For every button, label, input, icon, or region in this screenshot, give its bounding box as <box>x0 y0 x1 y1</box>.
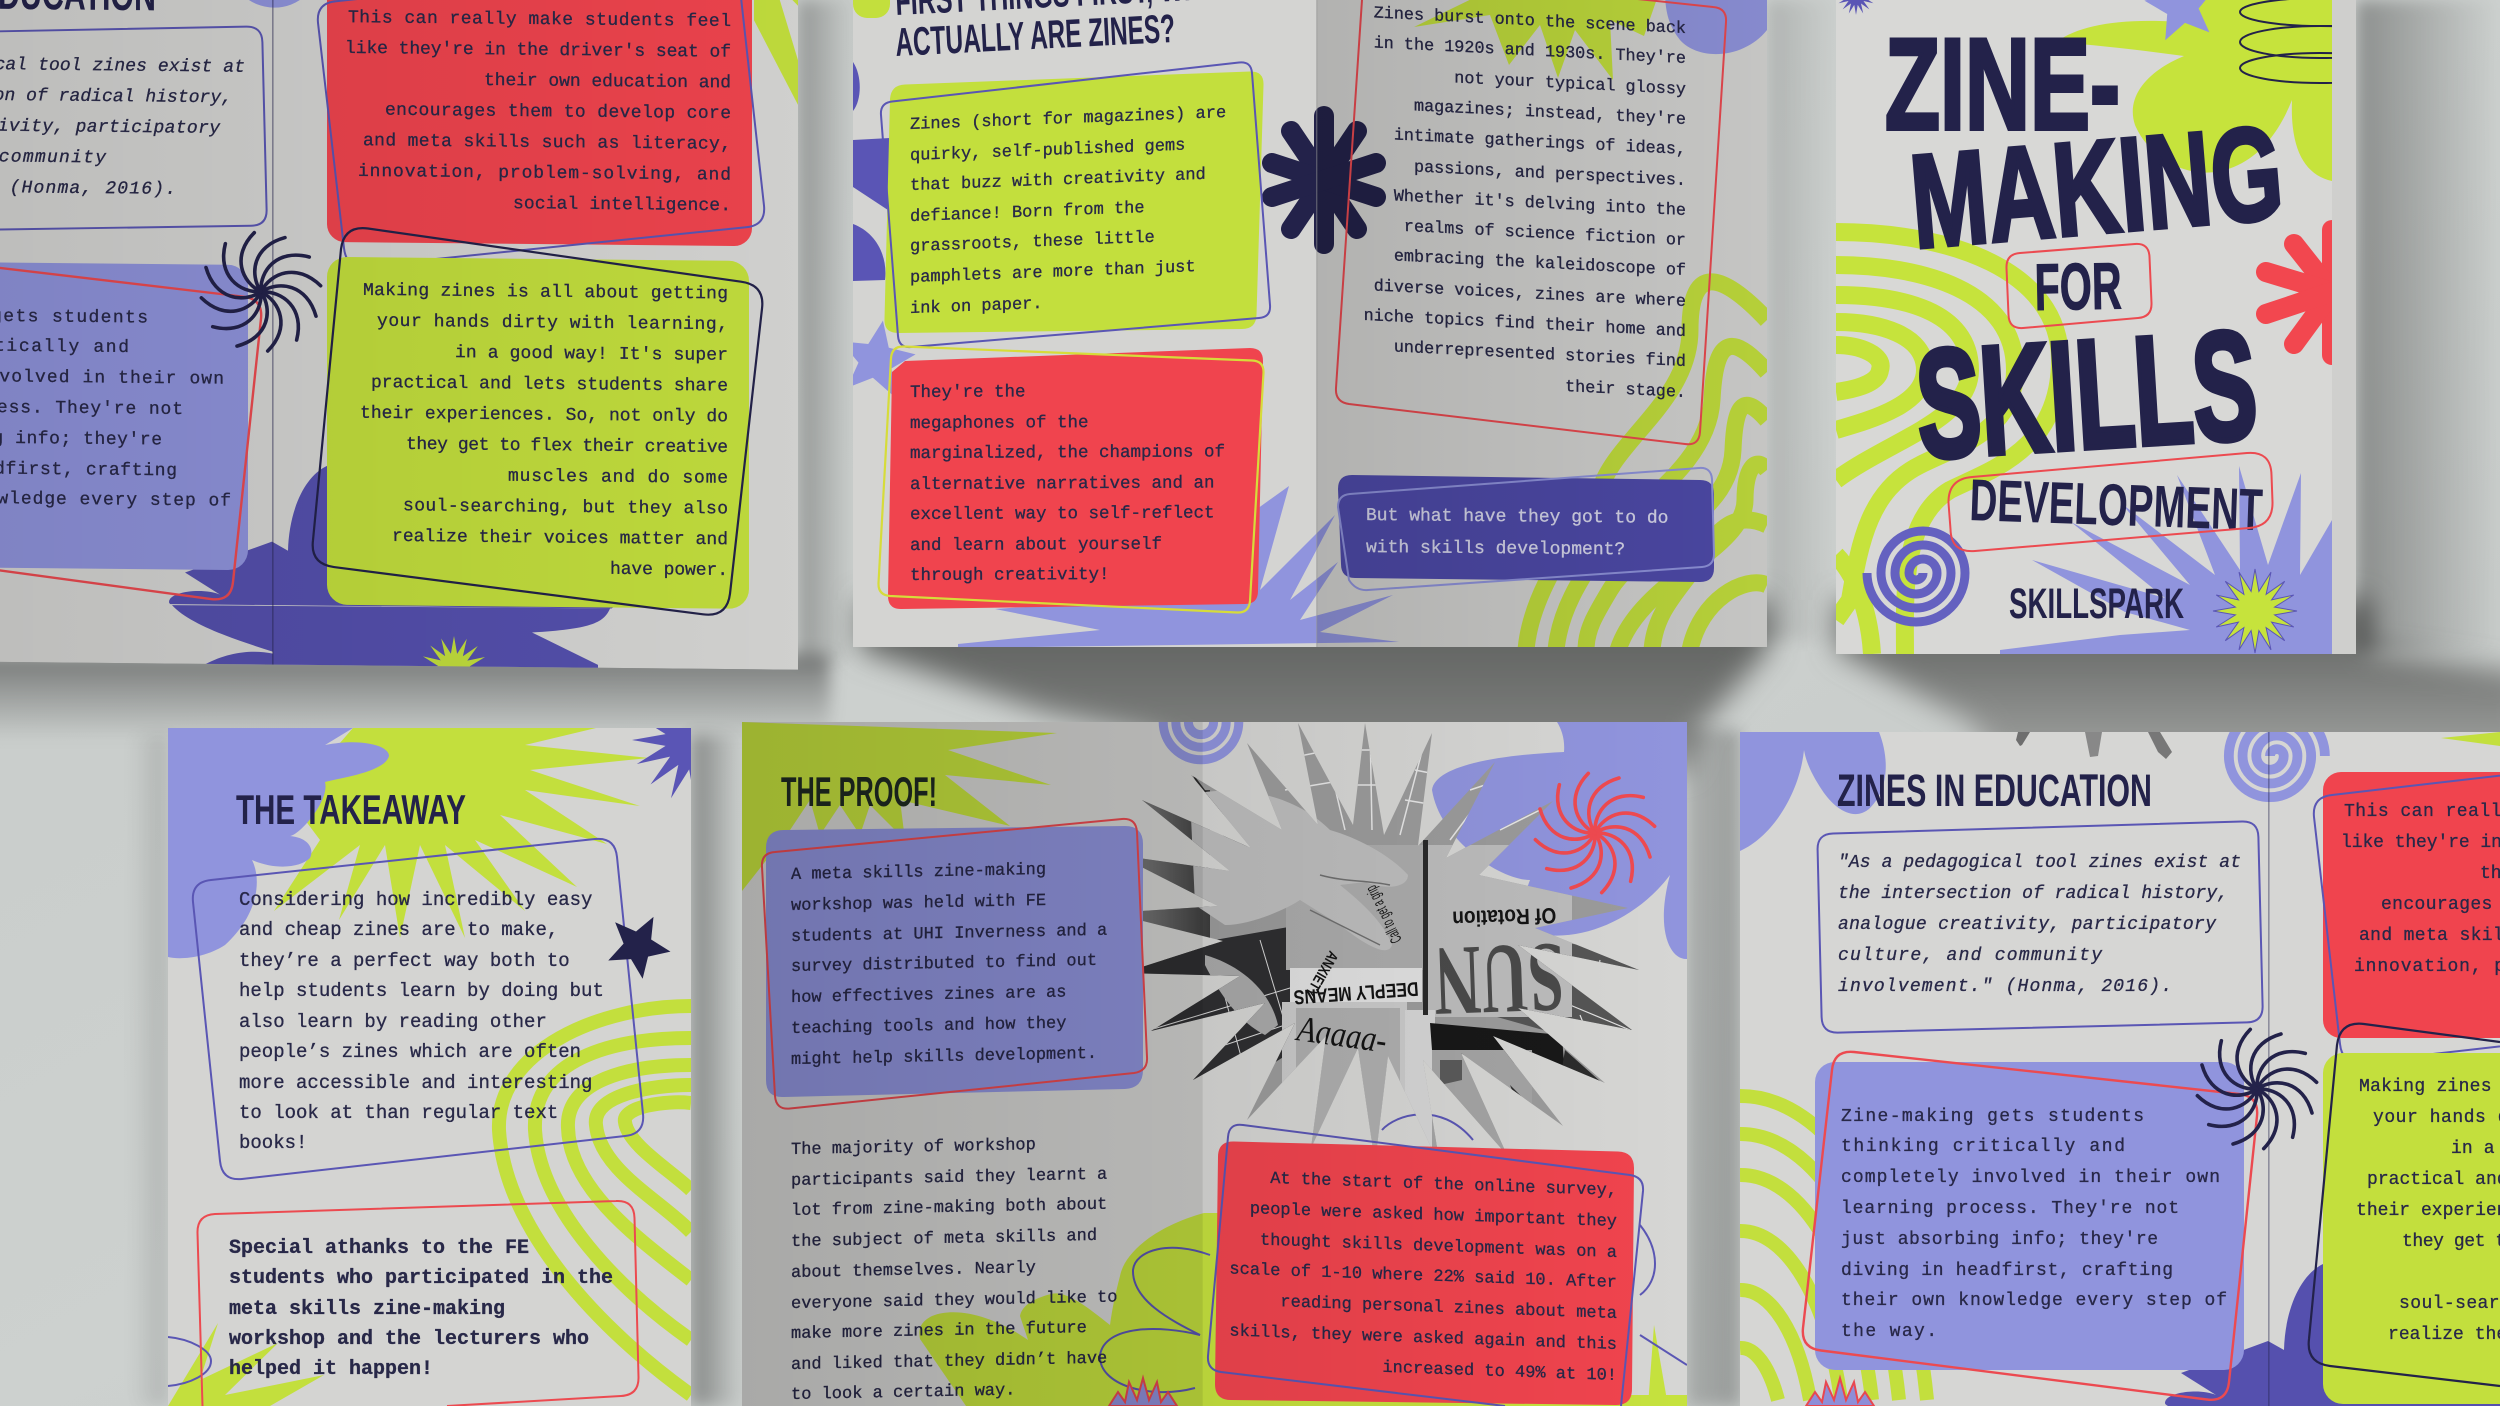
top spikes <box>1280 725 1540 840</box>
red box text <box>345 8 731 216</box>
periwinkle box text: Zine-making gets students <box>1841 1107 2144 1127</box>
takeaway text: to look at than regular text <box>239 1102 558 1124</box>
takeaway text: Considering how incredibly easy <box>239 889 592 911</box>
lime box text: your hands dirty with learning, <box>377 312 728 335</box>
hand <box>1190 791 1408 950</box>
lime box outline <box>881 62 1270 347</box>
red box text: their own education and <box>484 71 731 93</box>
lime box text: realize their voices matter and <box>392 527 728 550</box>
lime rays top-left <box>742 722 1057 891</box>
right page text: underrepresented stories find <box>1394 338 1686 372</box>
survey text: skills, they were asked again and this <box>1229 1322 1617 1355</box>
red box text: social intelligence. <box>513 194 731 216</box>
periwinkle text box <box>1815 1062 2244 1370</box>
red box text: marginalized, the champions of <box>910 442 1225 464</box>
outline box <box>193 839 643 1179</box>
navy outline <box>2309 1024 2500 1386</box>
quote text: the intersection of radical history, <box>1838 884 2228 904</box>
periwinkle box text <box>1841 1107 2227 1342</box>
cover title: SKILLS <box>1912 299 2261 491</box>
workshop text: survey distributed to find out <box>791 952 1097 977</box>
workshop text: students at UHI Inverness and a <box>791 922 1107 947</box>
right page text: Zines burst onto the scene back <box>1374 4 1686 39</box>
results paragraph: make more zines in the future <box>791 1319 1087 1344</box>
red box outline <box>1208 1125 1643 1406</box>
lime text box <box>327 257 749 609</box>
lime box text: defiance! Born from the <box>910 199 1145 227</box>
collage lettering: ANXIETY <box>1302 948 1341 1000</box>
lime wavy rings <box>1526 282 1767 650</box>
lime burst <box>274 728 649 938</box>
lime box text: their experiences. So, not only do <box>360 404 728 427</box>
quote text: culture, and community <box>1838 946 2103 966</box>
periwinkle blob <box>1432 722 1687 959</box>
red text box <box>1215 1141 1634 1405</box>
indigo outline <box>2314 751 2500 1062</box>
takeaway text: and cheap zines are to make, <box>239 919 558 941</box>
periwinkle box text: thinking critically and <box>1841 1137 2125 1157</box>
lime box text: muscles and do some <box>508 467 728 489</box>
periwinkle text box <box>766 826 1143 1097</box>
lime rays bottom-left <box>168 1323 324 1406</box>
right page text: their stage. <box>1565 378 1686 403</box>
lime box text <box>2356 1077 2500 1376</box>
icon: periwinkle star <box>853 320 916 394</box>
lime box text: Zines (short for magazines) are <box>910 104 1226 135</box>
results paragraph: and liked that they didn’t have <box>791 1350 1107 1375</box>
question text: But what have they got to do <box>1366 506 1668 529</box>
cover title: DEVELOPMENT <box>1969 467 2264 543</box>
red outline <box>1803 1052 2257 1400</box>
thanks text: Special athanks to the FE <box>229 1237 529 1260</box>
red box text: encourages them to develop core <box>385 101 731 124</box>
results paragraph <box>791 1134 1117 1405</box>
icon: navy swirl <box>2197 1029 2317 1149</box>
survey text: people were asked how important they <box>1250 1200 1617 1232</box>
survey text <box>1229 1168 1617 1386</box>
periwinkle text box <box>0 261 248 570</box>
takeaway text: they’re a perfect way both to <box>239 950 570 972</box>
results paragraph: to look a certain way. <box>791 1381 1015 1405</box>
panel: zine cover <box>1836 0 2400 654</box>
workshop text: teaching tools and how they <box>791 1014 1066 1039</box>
red outline around FOR <box>2006 244 2152 328</box>
lime concentric rings <box>499 1006 691 1395</box>
red text box <box>327 0 752 246</box>
right page outline <box>1336 0 1726 444</box>
collage lettering: DEEPLY MEANS <box>1293 977 1419 1008</box>
workshop text: A meta skills zine-making <box>791 861 1046 885</box>
panel: the proof spread <box>742 678 1687 1406</box>
panel title: THE PROOF! <box>781 768 937 815</box>
red box text <box>910 381 1225 586</box>
panel: zines in education spread, bottom-right <box>1740 708 2500 1406</box>
workshop text: how effectives zines are as <box>791 983 1066 1008</box>
icon: navy swirl <box>201 232 321 352</box>
lime box text <box>360 281 728 581</box>
panel title: THE TAKEAWAY <box>236 786 466 833</box>
right page text: passions, and perspectives. <box>1414 158 1686 191</box>
red box text: alternative narratives and an <box>910 473 1215 495</box>
red box outline <box>878 346 1264 613</box>
periwinkle burst <box>958 486 1399 648</box>
lime text box <box>2323 1053 2500 1404</box>
thanks text: meta skills zine-making <box>229 1298 505 1321</box>
right page text: realms of science fiction or <box>1404 218 1686 251</box>
results paragraph: lot from zine-making both about <box>791 1196 1107 1221</box>
red outline around DEVELOPMENT <box>1948 453 2273 551</box>
workshop text <box>791 860 1107 1070</box>
right page text: Whether it's delving into the <box>1394 187 1686 221</box>
right page text: intimate gatherings of ideas, <box>1394 126 1686 160</box>
red box text: megaphones of the <box>910 413 1089 434</box>
indigo loops <box>168 1337 211 1386</box>
quote outline <box>0 22 267 236</box>
results paragraph: everyone said they would like to <box>791 1288 1117 1314</box>
results paragraph: The majority of workshop <box>791 1136 1036 1160</box>
panel title: ZINES IN EDUCATION <box>1837 765 2152 816</box>
thanks text: students who participated in the <box>229 1267 613 1290</box>
quote outline <box>1818 821 2263 1033</box>
takeaway text: more accessible and interesting <box>239 1072 592 1094</box>
periwinkle box text: the way. <box>1841 1322 1937 1342</box>
collage lettering <box>1293 882 1566 1060</box>
takeaway text: books! <box>239 1132 307 1154</box>
icon: navy star <box>598 902 681 984</box>
lime box text: in a good way! It's super <box>455 343 728 366</box>
red box text: This can really make students feel <box>348 8 731 32</box>
spiky photo collage of hand holding zine <box>1100 715 1650 1175</box>
red box text: like they're in the driver's seat of <box>345 39 731 63</box>
question box outline <box>1338 468 1714 590</box>
workshop text: might help skills development. <box>791 1045 1097 1070</box>
periwinkle blob <box>1665 0 1767 54</box>
panel: the takeaway <box>168 677 758 1406</box>
red box text: through creativity! <box>910 565 1110 586</box>
workshop text: workshop was held with FE <box>791 892 1046 916</box>
survey text: scale of 1-10 where 22% said 10. After <box>1229 1260 1617 1293</box>
lime box text: pamphlets are more than just <box>910 258 1196 288</box>
periwinkle box text: learning process. They're not <box>1841 1199 2179 1219</box>
lime box text <box>910 104 1226 319</box>
panel: first things first spread <box>833 0 1767 650</box>
right page text <box>1364 4 1686 403</box>
icon: flower <box>1109 1378 1177 1406</box>
red box text: and learn about yourself <box>910 535 1162 556</box>
survey text: increased to 49% at 10! <box>1382 1359 1617 1386</box>
panel: zines in education spread, cropped top-left <box>0 0 798 706</box>
red box text: They're the <box>910 382 1026 403</box>
survey text: thought skills development was on a <box>1260 1232 1617 1263</box>
takeaway text: also learn by reading other <box>239 1011 547 1033</box>
lime box text: practical and lets students share <box>371 373 728 397</box>
indigo question box <box>1338 475 1714 582</box>
right page text: embracing the kaleidoscope of <box>1394 247 1686 281</box>
quote text: analogue creativity, participatory <box>1838 915 2217 935</box>
spiral top <box>1163 678 1251 760</box>
lime rays <box>1414 0 1660 80</box>
navy outline <box>313 228 762 615</box>
cover title: ZINE- <box>1885 11 2120 157</box>
indigo flower outlines <box>1100 1114 1687 1392</box>
periwinkle box outline <box>762 819 1147 1109</box>
red swirl <box>1535 773 1655 893</box>
results paragraph: the subject of meta skills and <box>791 1227 1097 1252</box>
lime box text: have power. <box>610 560 728 581</box>
collage lettering: SUN <box>1432 922 1566 1037</box>
collage lettering: Of Rotation <box>1452 903 1557 932</box>
lime box text: quirky, self-published gems <box>910 137 1185 166</box>
right page text: magazines; instead, they're <box>1414 97 1686 130</box>
lime blob <box>919 1213 1687 1406</box>
cover title: FOR <box>2034 248 2122 324</box>
quote text: "As a pedagogical tool zines exist at <box>1838 853 2241 873</box>
survey text: At the start of the online survey, <box>1270 1170 1617 1201</box>
results paragraph: about themselves. Nearly <box>791 1259 1036 1283</box>
lime text box <box>884 71 1264 333</box>
takeaway text <box>239 889 604 1154</box>
periwinkle box text <box>0 308 230 509</box>
lime box text: they get to flex their creative <box>406 435 728 458</box>
lime box text: ink on paper. <box>910 295 1043 319</box>
red text box <box>2323 772 2500 1038</box>
red box text: and meta skills such as literacy, <box>363 131 731 155</box>
thanks text: workshop and the lecturers who <box>229 1328 589 1351</box>
red text box <box>888 348 1263 609</box>
quote text: involvement." (Honma, 2016). <box>1838 977 2172 997</box>
cover artwork <box>1836 0 2400 654</box>
cover title: SKILLSPARK <box>2009 580 2184 628</box>
periwinkle blob <box>168 728 389 958</box>
right page text: niche topics find their home and <box>1364 307 1686 342</box>
takeaway text: people’s zines which are often <box>239 1041 581 1063</box>
collage lettering: Aaaaa- <box>1293 1008 1390 1060</box>
indigo burst <box>632 677 758 803</box>
quote text <box>1838 853 2241 997</box>
right page text: not your typical glossy <box>1454 69 1686 100</box>
icon: navy asterisk <box>1272 116 1376 244</box>
collage lettering: Call to get a grip <box>1363 882 1406 946</box>
right page text: diverse voices, zines are where <box>1374 277 1686 312</box>
periwinkle box text: their own knowledge every step of <box>1841 1291 2227 1311</box>
periwinkle box text: completely involved in their own <box>1841 1168 2220 1188</box>
cover title: MAKING <box>1905 99 2288 277</box>
lime box text: that buzz with creativity and <box>910 166 1206 196</box>
indigo outline <box>318 0 764 270</box>
periwinkle box text: diving in headfirst, crafting <box>1841 1261 2173 1281</box>
lime box text: grassroots, these little <box>910 229 1155 257</box>
question text: with skills development? <box>1366 538 1625 560</box>
takeaway text: help students learn by doing but <box>239 980 604 1002</box>
question text <box>1366 506 1668 561</box>
periwinkle box text: just absorbing info; they're <box>1841 1230 2158 1250</box>
red outline <box>0 250 261 600</box>
panel heading <box>896 0 1190 56</box>
survey text: reading personal zines about meta <box>1280 1293 1617 1324</box>
lime box text: Making zines is all about getting <box>363 281 728 304</box>
thanks text: helped it happen! <box>229 1358 433 1381</box>
thanks text <box>229 1237 613 1381</box>
cover title <box>1885 11 2288 628</box>
red box text: excellent way to self-reflect <box>910 503 1215 525</box>
red box text: innovation, problem-solving, and <box>358 162 731 186</box>
lime box text: soul-searching, but they also <box>403 496 728 519</box>
results paragraph: participants said they learnt a <box>791 1166 1107 1191</box>
red box text <box>2341 802 2500 1008</box>
thanks outline <box>197 1201 639 1406</box>
quote text <box>0 54 245 201</box>
right page text: in the 1920s and 1930s. They're <box>1374 34 1686 69</box>
